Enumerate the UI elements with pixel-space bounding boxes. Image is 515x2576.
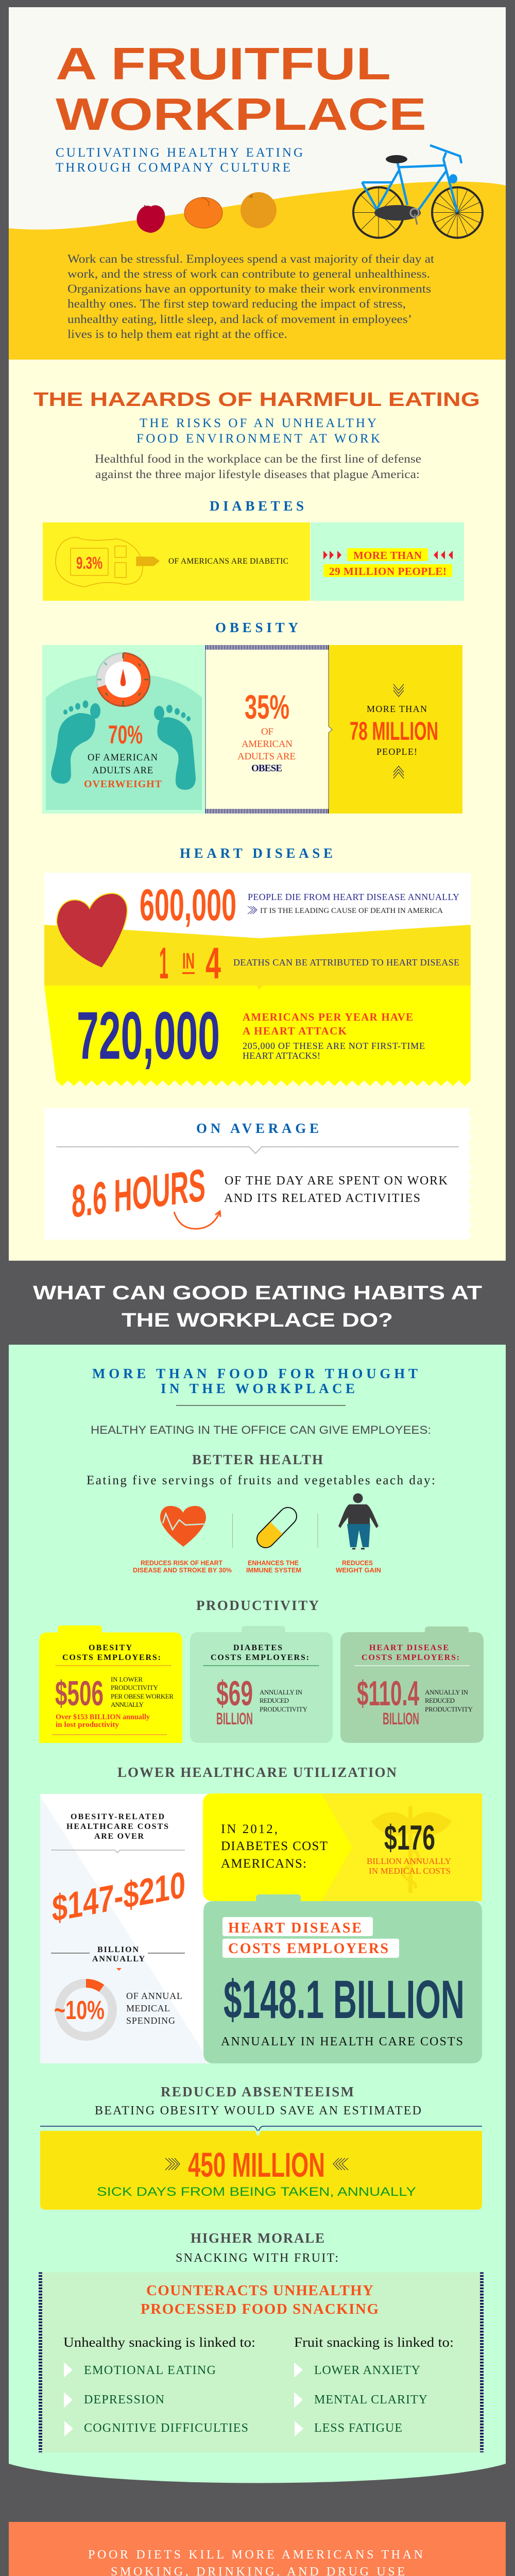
intro text: Healthful food in the workplace can be the first line of defense: [95, 452, 421, 465]
heading: productivity: PRODUCTIVITY: [196, 1598, 319, 1613]
meter reading: 9.3%: [76, 553, 102, 572]
text: heart attack: [243, 1011, 425, 1061]
intro text: HEALTHY EATING IN THE OFFICE CAN GIVE EMPLOYEES:: [91, 1423, 431, 1436]
stat: 600,000: 600,000: [140, 880, 236, 930]
icon: chevron: [248, 906, 257, 914]
icon: peach: [184, 197, 222, 228]
column: fruit snacking: [294, 2335, 454, 2436]
stat: $110.4 billion: BILLION: [383, 1709, 419, 1728]
heading: what can good eating habits do: THE WORKPLACE DO?: [122, 1310, 393, 1331]
heading: morale: HIGHER MORALE: [191, 2230, 324, 2246]
icon: right foot: [154, 705, 196, 790]
column: fruit snacking: LESS FATIGUE: [314, 2421, 402, 2435]
panel: heart disease costs: ANNUALLY IN HEALTH CARE COSTS: [221, 2035, 463, 2048]
dotted divider: [57, 1147, 459, 1154]
icon: glucose meter: [56, 537, 159, 587]
callout: 29 million: [323, 548, 453, 578]
icon: apple: [136, 205, 165, 233]
intro text: against the three major lifestyle diseases that plague America:: [95, 468, 420, 481]
card: obesity costs: OBESITY: [89, 1643, 132, 1652]
label: AMERICAN: [242, 739, 293, 750]
card: diabetes costs: PRODUCTIVITY: [260, 1705, 308, 1713]
heading: what can good eating habits do: WHAT CAN GOOD EATING HABITS AT: [33, 1282, 482, 1304]
label: [237, 726, 296, 774]
intro paragraph: [67, 252, 435, 341]
icon: orange: [241, 192, 277, 228]
card: heart disease costs: PRODUCTIVITY: [425, 1705, 473, 1713]
icon: chevrons left: [333, 2158, 348, 2170]
title: [56, 38, 426, 140]
label: OBESE: [251, 763, 282, 774]
panel: change in the workplace: [9, 2522, 506, 2576]
panel: hazards: [9, 360, 506, 1261]
card: diabetes costs: COSTS EMPLOYERS:: [211, 1653, 309, 1662]
panel: snacking: [39, 2272, 484, 2452]
text: leading cause: IT IS THE LEADING CAUSE OF DEATH IN AMERICA: [260, 907, 443, 915]
heading: what can good eating habits do: [33, 1282, 482, 1331]
heading: [92, 1366, 418, 1396]
panel: diabetes medical costs: AMERICANS:: [221, 1857, 306, 1871]
text: heart attack: AMERICANS PER YEAR HAVE: [243, 1011, 413, 1023]
card: obesity costs: COSTS EMPLOYERS:: [62, 1653, 161, 1662]
panel: 450 million: [40, 2131, 482, 2210]
subheading: THE RISKS OF AN UNHEALTHY: [140, 416, 376, 430]
stat: 1 in 4: IN: [182, 948, 195, 974]
icon labels: IMMUNE SYSTEM: [246, 1567, 301, 1574]
subtitle: CULTIVATING HEALTHY EATING: [56, 146, 303, 160]
stat: $69 billion: [216, 1674, 253, 1728]
panel: obesity healthcare costs: ARE OVER: [94, 1832, 144, 1841]
label: OVERWEIGHT: [84, 778, 162, 790]
stat: 78 million: 78 MILLION: [350, 717, 438, 745]
icon: heart with pulse: [160, 1506, 206, 1547]
text: SICK DAYS FROM BEING TAKEN, ANNUALLY: [97, 2185, 416, 2199]
panel: diabetes medical costs: [203, 1793, 482, 1901]
label: OF AMERICAN: [88, 753, 158, 763]
panel: on average: [44, 1108, 471, 1240]
arrow: [174, 1211, 220, 1229]
panel: obesity healthcare costs: HEALTHCARE COSTS: [66, 1822, 168, 1831]
intro paragraph: unhealthy eating, little sleep, and lack of movement in employees’: [67, 313, 412, 326]
column: unhealthy snacking: EMOTIONAL EATING: [84, 2364, 216, 2377]
icon labels: WEIGHT GAIN: [336, 1567, 381, 1574]
heading: THE HAZARDS OF HARMFUL EATING: [33, 389, 480, 411]
card: diabetes costs: ANNUALLY IN: [260, 1688, 303, 1696]
stat: 1 in 4: 1: [159, 939, 168, 988]
panel: diabetes medical costs: DIABETES COST: [221, 1839, 328, 1853]
panel: 78 million: [329, 645, 462, 814]
panel: benefits: [9, 1345, 506, 2483]
panel: obesity healthcare costs: [40, 1794, 210, 2063]
stat: 70%: 70%: [108, 720, 143, 749]
intro paragraph: lives is to help them eat right at the office.: [67, 328, 287, 341]
panel: diabetes medical costs: IN 2012,: [221, 1822, 278, 1836]
heading: obesity: OBESITY: [215, 620, 298, 635]
icon labels: ENHANCES THE: [248, 1560, 299, 1567]
icon: capsule: [258, 1516, 288, 1547]
stat: 1 in 4: [159, 939, 221, 988]
stat: 8.6 hours: 8.6 HOURS: [72, 1159, 205, 1227]
heading: PROCESSED FOOD SNACKING: [141, 2301, 379, 2317]
text: attributed deaths: DEATHS CAN BE ATTRIBUTED TO HEART DISEASE: [233, 957, 459, 968]
panel: obesity obese: [205, 645, 329, 814]
subheading: [136, 416, 380, 446]
text: BEATING OBESITY WOULD SAVE AN ESTIMATED: [95, 2104, 421, 2117]
panel: heart disease: [44, 873, 471, 1086]
card: diabetes costs: REDUCED: [260, 1697, 289, 1704]
subtitle: THROUGH COMPANY CULTURE: [56, 161, 290, 175]
icon: bicycle: [353, 145, 483, 238]
panel: header: [9, 7, 506, 360]
panel: obesity healthcare costs: OF ANNUAL: [126, 1991, 182, 2001]
intro paragraph: Organizations have an opportunity to make their work environments: [67, 282, 431, 295]
stat: 450 million: 450 MILLION: [188, 2146, 325, 2184]
intro paragraph: work, and the stress of work can contribute to general unhealthiness.: [67, 267, 430, 280]
heading: [88, 2548, 424, 2576]
card: heart disease costs: [340, 1626, 484, 1743]
column: unhealthy snacking: DEPRESSION: [84, 2393, 164, 2406]
card: obesity costs: in lost productivity: [56, 1721, 119, 1729]
panel: heart disease costs: [203, 1894, 482, 2063]
heading: MORE THAN FOOD FOR THOUGHT: [92, 1366, 418, 1381]
card: heart disease costs: REDUCED: [425, 1697, 455, 1704]
panel: obesity healthcare costs: OBESITY-RELATED: [71, 1812, 164, 1821]
stat: 720,000: 720,000: [77, 997, 220, 1073]
panel: obesity healthcare costs: SPENDING: [126, 2015, 175, 2026]
heading: healthcare: LOWER HEALTHCARE UTILIZATION: [117, 1765, 397, 1780]
text: AND ITS RELATED ACTIVITIES: [224, 1192, 420, 1205]
icon: left foot: [51, 701, 100, 784]
subtitle: [56, 146, 303, 175]
icon: chevrons down: [393, 684, 404, 697]
icon: chevrons up: [393, 766, 404, 778]
panel: obesity healthcare costs: BILLION: [97, 1945, 139, 1954]
panel: diabetes medical costs: BILLION ANNUALLY: [367, 1856, 451, 1866]
callout: 29 million: MORE THAN: [353, 549, 422, 562]
text: heart attack: HEART ATTACKS!: [243, 1050, 320, 1061]
text: [367, 704, 427, 757]
text: SNACKING WITH FRUIT:: [176, 2251, 338, 2265]
icon: chevrons right: [165, 2158, 180, 2170]
chart: 10 percent donut: [54, 1984, 112, 2036]
icon labels: REDUCES: [342, 1560, 373, 1567]
icon labels: [133, 1560, 381, 1574]
subheading: Eating five servings of fruits and vegetables each day:: [87, 1473, 435, 1487]
heading: POOR DIETS KILL MORE AMERICANS THAN: [88, 2548, 423, 2562]
icon labels: REDUCES RISK OF HEART: [141, 1560, 222, 1567]
panel: obesity healthcare costs: ANNUALLY: [92, 1955, 145, 1963]
heading: ON AVERAGE: [196, 1121, 319, 1136]
column: fruit snacking: MENTAL CLARITY: [314, 2393, 427, 2406]
heading: better health: BETTER HEALTH: [192, 1452, 323, 1467]
yellow hill: [9, 181, 506, 360]
icon: person: [338, 1493, 379, 1549]
card: obesity costs: IN LOWER: [111, 1675, 143, 1683]
heading: IN THE WORKPLACE: [161, 1381, 355, 1396]
panel: diabetes stat: [43, 522, 464, 601]
intro paragraph: Work can be stressful. Employees spend a vast majority of their day at: [67, 252, 435, 265]
stat: $69 billion: BILLION: [216, 1709, 253, 1728]
card: obesity costs: Over $153 BILLION annually: [56, 1713, 150, 1721]
label: ADULTS ARE: [237, 751, 296, 762]
heading: absenteeism: REDUCED ABSENTEEISM: [161, 2084, 354, 2099]
text: heart attack: 205,000 OF THESE ARE NOT FIRST-TIME: [243, 1041, 425, 1051]
label: [84, 753, 162, 790]
title: WORKPLACE: [56, 89, 426, 140]
label: ADULTS ARE: [92, 766, 153, 776]
label: OF AMERICANS ARE DIABETIC: [168, 557, 288, 566]
heading: diabetes: DIABETES: [210, 498, 304, 514]
title: A FRUITFUL: [56, 38, 391, 89]
icon labels: DISEASE AND STROKE BY 30%: [133, 1567, 232, 1574]
text: OF THE DAY ARE SPENT ON WORK: [225, 1174, 448, 1188]
card: diabetes costs: DIABETES: [233, 1643, 282, 1652]
subheading: FOOD ENVIRONMENT AT WORK: [136, 432, 380, 446]
card: obesity costs: [39, 1625, 182, 1743]
column: fruit snacking: Fruit snacking is linked to:: [294, 2335, 454, 2350]
card: obesity costs: ANNUALLY: [111, 1701, 144, 1708]
stat: $506: $506: [55, 1674, 104, 1713]
panel: heart disease costs: HEART DISEASE: [228, 1920, 362, 1936]
stat: $110.4 billion: [357, 1674, 419, 1728]
stat: $147-$210: $147-$210: [52, 1864, 185, 1930]
card: heart disease costs: HEART DISEASE: [369, 1643, 449, 1652]
card: heart disease costs: ANNUALLY IN: [425, 1688, 469, 1696]
column: fruit snacking: LOWER ANXIETY: [314, 2364, 420, 2377]
column: unhealthy snacking: [63, 2335, 255, 2436]
card: diabetes costs: [190, 1626, 333, 1743]
chart: 10 percent donut: ~10%: [54, 1995, 105, 2025]
column: unhealthy snacking: Unhealthy snacking is linked to:: [63, 2335, 255, 2350]
column: unhealthy snacking: COGNITIVE DIFFICULTIES: [84, 2421, 248, 2435]
card: obesity costs: PRODUCTIVITY: [111, 1684, 159, 1691]
callout: 29 million: 29 MILLION PEOPLE!: [329, 565, 447, 578]
heading: COUNTERACTS UNHEALTHY: [146, 2282, 373, 2299]
stat: 35%: 35%: [245, 688, 289, 726]
icon: scale dial: [96, 652, 150, 707]
icon: caduceus: [371, 1806, 452, 1893]
card: obesity costs: PER OBESE WORKER: [111, 1692, 174, 1700]
text: [224, 1174, 448, 1205]
stat: 1 in 4: 4: [205, 939, 221, 988]
panel: heart disease costs: COSTS EMPLOYERS: [228, 1941, 388, 1957]
heading: [141, 2282, 379, 2317]
text: deaths annually: PEOPLE DIE FROM HEART DISEASE ANNUALLY: [248, 892, 459, 902]
stat: $110.4 billion: $110.4: [357, 1674, 419, 1713]
panel: obesity overweight: [42, 645, 205, 814]
icon: heart: [57, 893, 127, 968]
text: MORE THAN: [367, 704, 427, 714]
stat: $176: $176: [384, 1818, 435, 1857]
stat: $69 billion: $69: [216, 1674, 253, 1713]
intro text: [95, 452, 421, 481]
label: OF: [261, 726, 273, 737]
text: heart attack: A HEART ATTACK: [243, 1025, 347, 1037]
panel: obesity healthcare costs: MEDICAL: [126, 2003, 170, 2013]
heading: heart disease: HEART DISEASE: [180, 845, 333, 861]
panel: diabetes medical costs: IN MEDICAL COSTS: [369, 1866, 451, 1876]
intro paragraph: healthy ones. The first step toward reducing the impact of stress,: [67, 297, 406, 310]
text: PEOPLE!: [376, 747, 417, 757]
card: heart disease costs: COSTS EMPLOYERS:: [362, 1653, 459, 1662]
